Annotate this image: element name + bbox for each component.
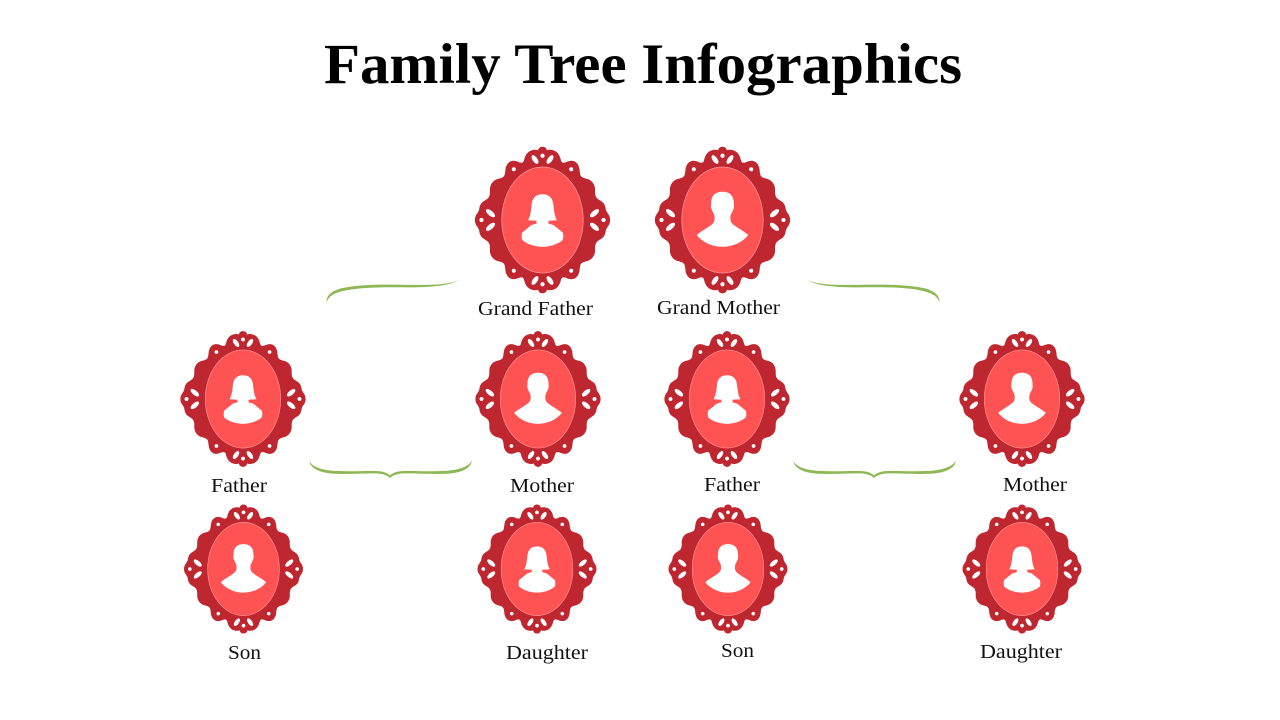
portrait: son left bbox=[184, 504, 303, 634]
label: son left: Son bbox=[228, 642, 261, 664]
portrait: daughter left bbox=[478, 504, 596, 634]
connector: left couple brace bbox=[309, 460, 472, 478]
connector: grandparents to right parents bbox=[806, 280, 939, 302]
connector: grandparents to left parents bbox=[327, 280, 460, 302]
portrait: grand mother bbox=[655, 147, 790, 293]
portrait: father left bbox=[180, 331, 306, 467]
label: mother left: Mother bbox=[510, 475, 574, 497]
label: father left: Father bbox=[211, 475, 267, 497]
label: mother right: Mother bbox=[1003, 474, 1067, 496]
portrait: son right bbox=[669, 504, 787, 634]
connector: right couple brace bbox=[793, 460, 956, 478]
portrait: daughter right bbox=[963, 504, 1081, 634]
label: grand mother: Grand Mother bbox=[657, 297, 780, 319]
label: father right: Father bbox=[704, 474, 760, 496]
portrait: mother left bbox=[475, 331, 601, 467]
label: grand father: Grand Father bbox=[478, 298, 593, 320]
label: daughter left: Daughter bbox=[506, 642, 588, 664]
portrait: father right bbox=[664, 331, 790, 467]
portrait: grand father bbox=[475, 147, 610, 293]
title: Family Tree Infographics bbox=[324, 33, 962, 96]
label: daughter right: Daughter bbox=[980, 641, 1062, 663]
label: son right: Son bbox=[721, 640, 754, 662]
portrait: mother right bbox=[959, 331, 1085, 467]
